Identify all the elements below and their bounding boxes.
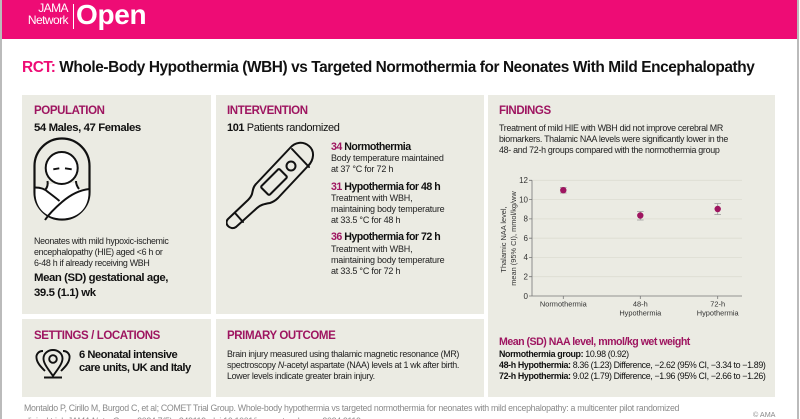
y axis tick labels: 8 [524,215,529,224]
results lines: 48-h Hypothermia: 8.36 (1.23) Difference, −2.62 (95% CI, −3.34 to −1.89) [499,360,765,370]
axes [529,180,742,299]
citation [24,403,679,419]
arm description: at 33.5 °C for 72 h [331,266,400,276]
x axis labels: Normothermia [540,300,588,308]
arm description: Treatment with WBH, [331,244,412,254]
arm heading: 31 hypothermia for 48 h: 31 Hypothermia for 48 h [331,181,440,193]
y axis tick labels: 2 [524,272,529,282]
heading: population: POPULATION [34,105,105,117]
data points [560,187,566,193]
arm description: Body temperature maintained [331,153,444,163]
icon: swaddled baby [33,137,91,221]
y axis tick labels: 0 [524,292,529,301]
gestational age: 39.5 (1.1) wk [34,287,96,299]
heading: settings: SETTINGS / LOCATIONS [34,330,160,342]
gestational age [34,272,168,299]
y axis tick labels: 6 [524,234,529,243]
population description [34,236,169,268]
y axis tick labels: 12 [519,176,529,185]
outcome description: Lower levels indicate greater brain injury. [227,371,375,381]
panel: primary outcome [216,319,484,397]
findings summary [499,123,728,155]
arm description: at 33.5 °C for 48 h [331,215,400,225]
logo: JAMA Network: Network [28,12,68,26]
panel: population [22,95,211,314]
population description: encephalopathy (HIE) aged <6 h or [34,247,162,257]
y axis tick labels: 4 [524,253,529,262]
settings text [79,348,192,374]
error bars [560,188,721,220]
x axis labels: 48-h [633,300,648,308]
population description: Neonates with mild hypoxic-ischemic [34,236,169,246]
arm description [331,153,444,174]
arm description: Treatment with WBH, [331,193,412,203]
gestational age: Mean (SD) gestational age, [34,272,168,284]
chart: thalamic NAA level [499,176,742,318]
population counts: 54 Males, 47 Females [34,122,141,134]
x axis labels: 72-h [710,300,725,308]
settings text: 6 Neonatal intensive [79,348,177,360]
arm description [331,193,444,225]
outcome description [227,349,459,381]
settings text: care units, UK and Italy [79,362,191,374]
results lines [499,349,766,381]
arm description: at 37 °C for 72 h [331,164,393,174]
arm description [331,244,444,276]
copyright: © AMA [753,410,775,419]
icon: map pins [36,349,70,378]
icon: thermometer [226,142,314,230]
citation: Montaldo P, Cirillo M, Burgod C, et al; COMET Trial Group. Whole-body hypothermia vs targeted normothermia for neonates with mild encephalopathy: a multicenter pilot randomized [24,403,679,413]
outcome description: spectroscopy N-acetyl aspartate (NAA) levels at 1 wk after birth. [227,360,459,370]
findings summary: biomarkers. Thalamic NAA levels were significantly lower in the [499,134,728,144]
results heading: Mean (SD) NAA level, mmol/kg wet weight [499,336,690,348]
arm description: maintaining body temperature [331,255,444,265]
logo: JAMA Network: JAMA [38,1,68,15]
mean NAA results [499,336,766,381]
right page border [797,0,798,419]
heading: findings: FINDINGS [499,105,551,117]
arm: hypothermia 48 h [331,181,444,225]
left page border [0,0,2,419]
arm heading: 36 hypothermia for 72 h: 36 Hypothermia for 72 h [331,231,440,243]
logo: divider [72,4,74,29]
arm: normothermia [331,141,444,174]
title: RCT: Whole-Body Hypothermia (WBH) vs Targeted Normothermia for Neonates With Mild Encephalopathy [22,59,754,76]
x axis labels: Hypothermia [697,308,740,318]
population description: 6-48 h if already receiving WBH [34,258,150,268]
arm: hypothermia 72 h [331,231,444,276]
y axis tick labels: 10 [519,195,529,204]
arm description: maintaining body temperature [331,204,444,214]
y axis title: Thalamic NAA level, [499,206,508,273]
panel: intervention [216,95,484,314]
x axis labels [540,300,740,318]
panel: findings [488,95,775,397]
arm heading: 34 normothermia: 34 Normothermia [331,141,411,153]
patients randomized: 101 Patients randomized [227,122,340,134]
results lines: 72-h Hypothermia: 9.02 (1.79) Difference, −1.96 (95% CI, −2.66 to −1.26) [499,371,765,381]
x axis labels: Hypothermia [619,308,662,318]
logo: JAMA Network [28,1,68,26]
y axis title line 2: mean (95% CI), mmol/kg/ww [509,191,518,286]
outcome description: Brain injury measured using thalamic magnetic resonance (MR) [227,349,459,359]
findings summary: Treatment of mild HIE with WBH did not improve cerebral MR [499,123,723,133]
results lines: Normothermia group: 10.98 (0.92) [499,349,629,359]
findings summary: 48- and 72-h groups compared with the normothermia group [499,145,720,155]
y axis tick labels [519,176,529,301]
heading: primary outcome: PRIMARY OUTCOME [227,330,335,342]
heading: intervention: INTERVENTION [227,105,308,117]
panel: settings / locations [22,319,211,397]
header band [2,0,797,39]
